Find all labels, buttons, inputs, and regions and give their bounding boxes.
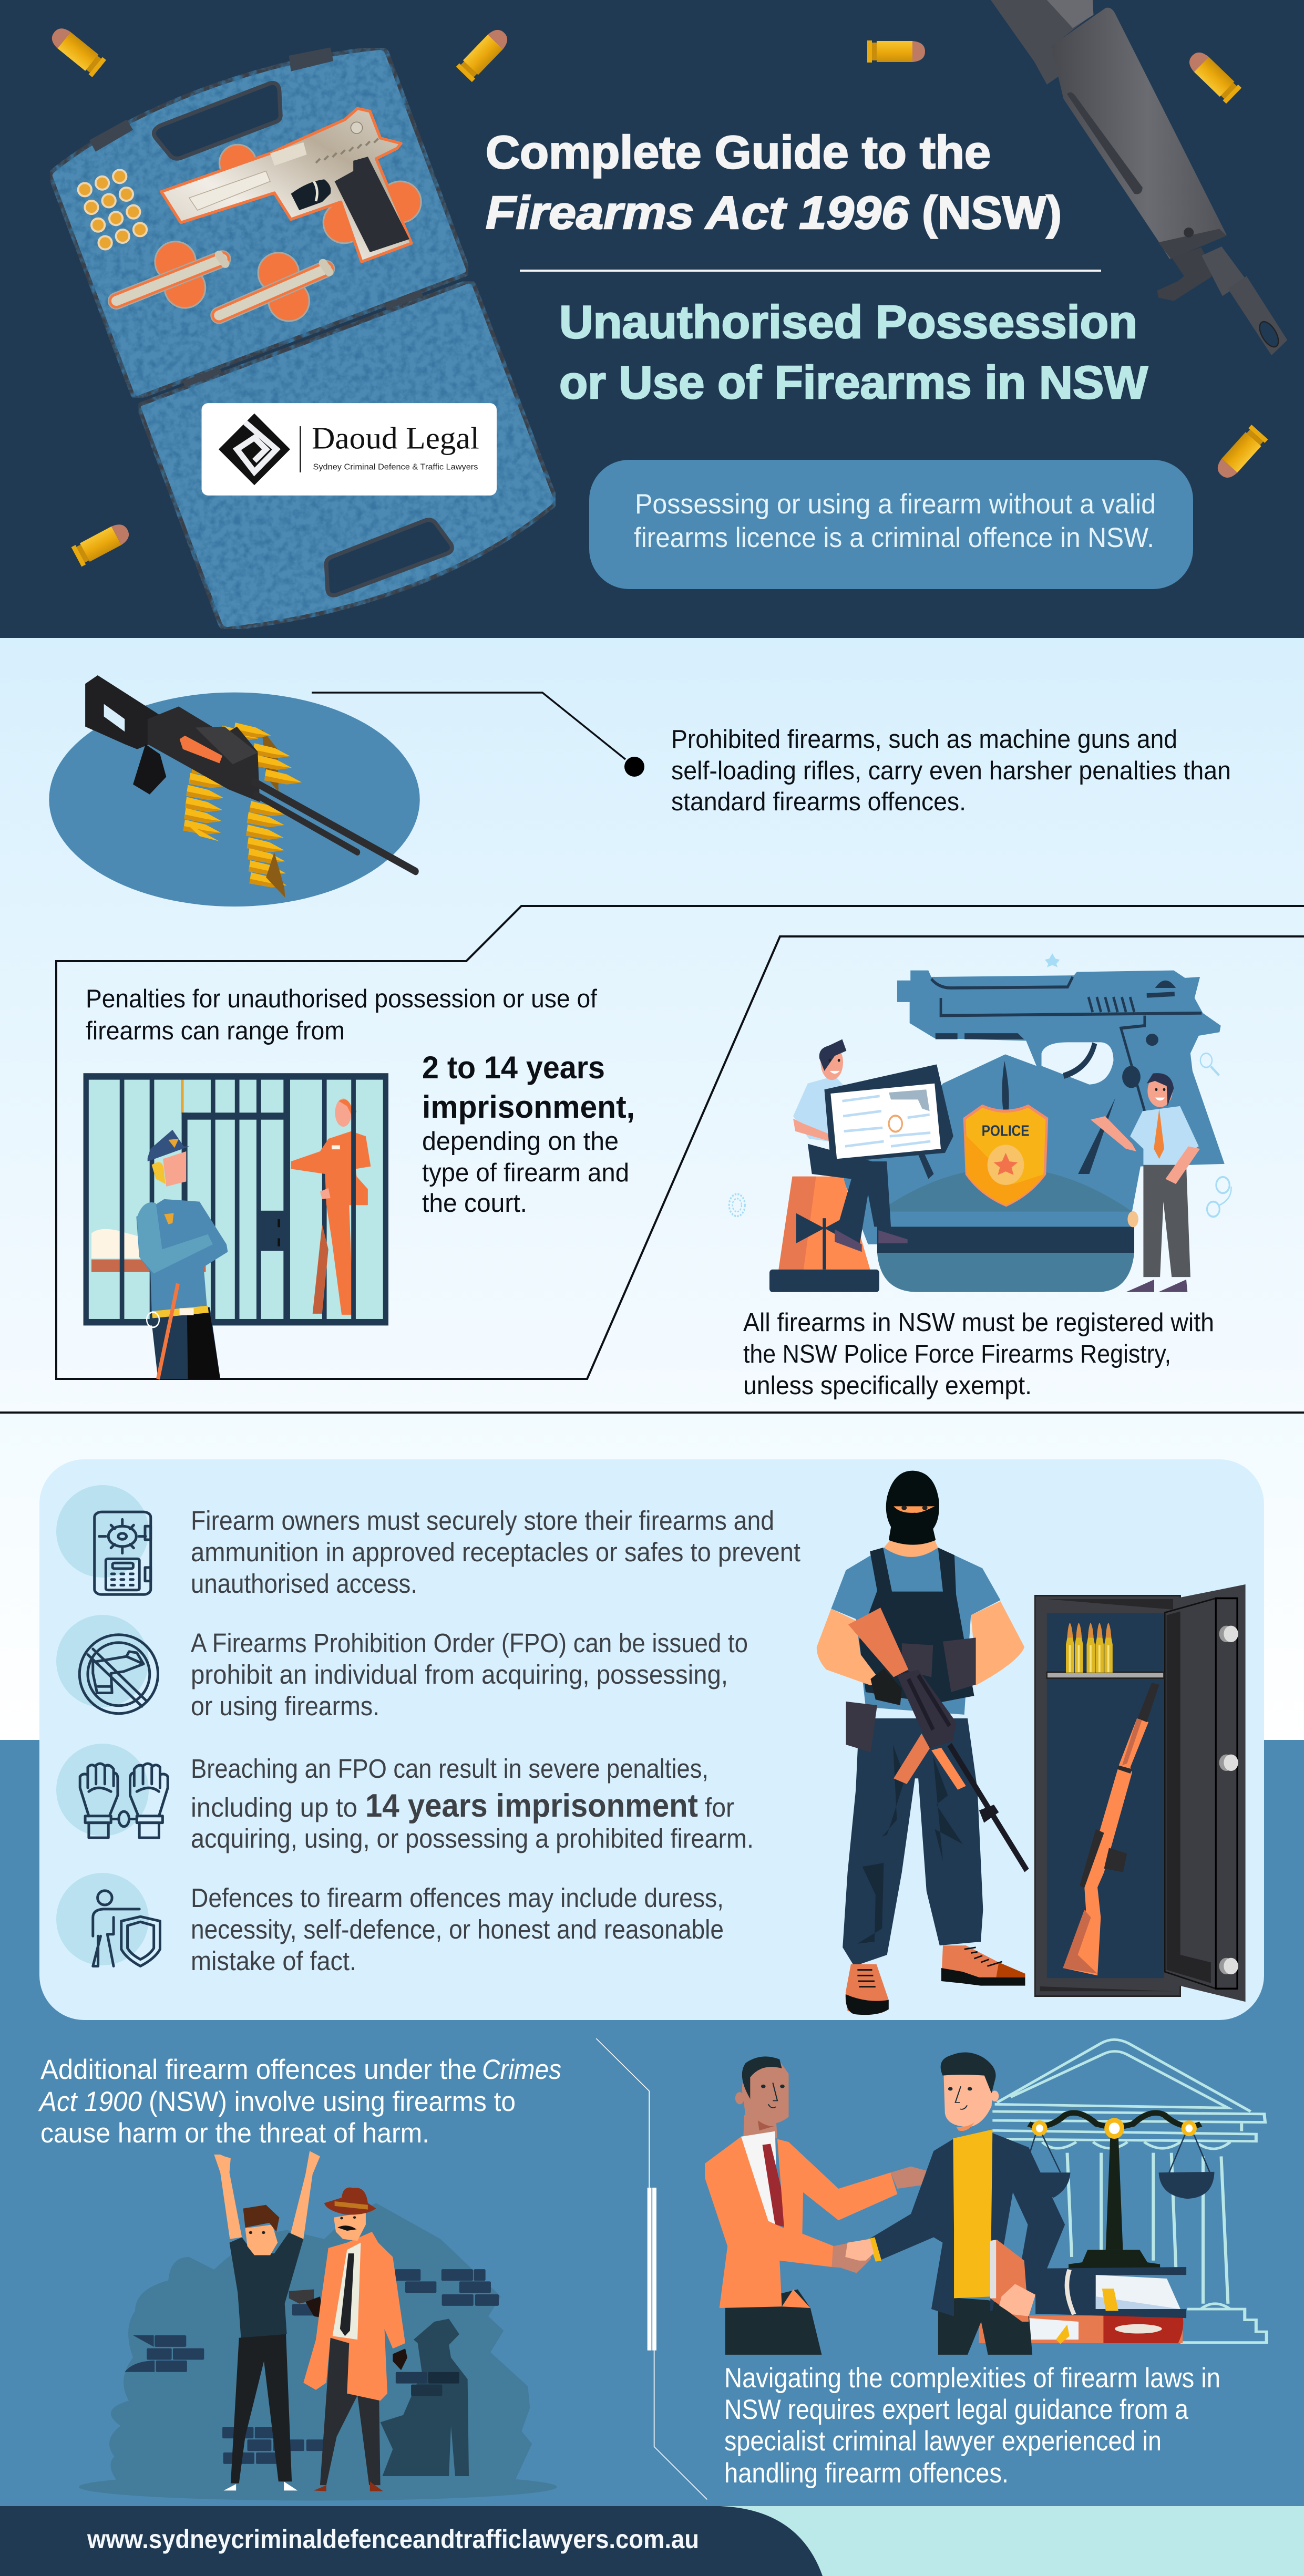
spare barrels xyxy=(116,255,329,315)
logo mark xyxy=(219,414,290,485)
orange receiver xyxy=(180,736,222,763)
callout: licence offence: firearms licence is a criminal offence in NSW. xyxy=(634,522,1154,553)
text: breaching an FPO: Breaching an FPO can result in severe penalties, xyxy=(191,1754,709,1784)
text: firearms prohibition order: A Firearms Prohibition Order (FPO) can be issued to xyxy=(191,1628,748,1658)
courthouse outline xyxy=(992,2039,1267,2343)
text: defences: Defences to firearm offences may include duress, xyxy=(191,1883,724,1913)
text: additional firearm offences: Crimes xyxy=(482,2054,561,2085)
subtitle: or Use of Firearms in NSW xyxy=(559,356,1148,408)
seat and gavel xyxy=(769,1177,879,1292)
police badge xyxy=(964,1106,1047,1205)
ammunition pouches xyxy=(846,1637,976,1752)
ammunition belts xyxy=(183,723,302,898)
neck xyxy=(884,1540,938,1557)
ground shadow xyxy=(79,2474,557,2500)
shelf xyxy=(1047,1672,1164,1678)
lock keyholes xyxy=(278,1219,280,1246)
safe door xyxy=(1165,1598,1216,1988)
pistol detail lines xyxy=(931,977,1202,1111)
latches and hinges xyxy=(89,47,423,387)
arms xyxy=(817,1609,880,1685)
rifle xyxy=(848,1608,1027,1870)
text: 2 to 14 years imprisonment: type of firearm and xyxy=(422,1159,629,1187)
text: prohibited firearms: self-loading rifles, carry even harsher penalties than xyxy=(671,757,1231,785)
subtitle xyxy=(559,296,1148,408)
pistol xyxy=(161,108,412,262)
illustration: hold-up scene xyxy=(79,2151,557,2500)
illustration: masked gunman xyxy=(817,1471,1027,2015)
text: additional firearm offences xyxy=(38,2054,561,2149)
bullet 4 xyxy=(1185,48,1241,104)
revolver and gloved hand xyxy=(289,2289,324,2318)
illustration: lawyer handshake xyxy=(705,2039,1267,2355)
bricks xyxy=(125,2269,499,2464)
bottom handle xyxy=(326,520,452,595)
light section background xyxy=(0,638,1304,1413)
bullet 2 xyxy=(456,25,512,82)
text: secure storage xyxy=(191,1506,800,1599)
gun stock xyxy=(85,675,162,749)
connector line to prohibited firearms note xyxy=(312,693,644,777)
door bolts xyxy=(1219,1626,1238,1974)
illustration: rifle barrel xyxy=(991,0,1287,355)
barrels xyxy=(254,782,416,871)
icon: safe with keypad xyxy=(95,1512,151,1594)
divider bracket lines xyxy=(596,2038,707,2499)
text: defences xyxy=(191,1883,724,1976)
icon: cuffed hands xyxy=(80,1764,168,1838)
title: (NSW) xyxy=(922,187,1062,239)
scales of justice xyxy=(1029,2113,1215,2269)
text: breaching an FPO: 14 years imprisonment xyxy=(365,1788,698,1824)
text: defences: necessity, self-defence, or honest and reasonable xyxy=(191,1914,724,1944)
text: firearms prohibition order: prohibit an individual from acquiring, possessing, xyxy=(191,1660,728,1689)
bars in front of prisoner xyxy=(351,1077,356,1321)
text: penalties intro xyxy=(86,985,597,1045)
top handle xyxy=(154,83,281,159)
text: secure storage: unauthorised access. xyxy=(191,1569,417,1599)
orange foam cut-outs xyxy=(155,145,421,321)
bullet 3 xyxy=(867,40,925,63)
eye slot xyxy=(894,1506,935,1513)
logo wordmark: Daoud Legal xyxy=(312,421,479,455)
text: 2 to 14 years imprisonment: 2 to 14 years xyxy=(422,1050,605,1085)
police badge: POLICE xyxy=(982,1122,1030,1139)
standing officer xyxy=(1091,1073,1200,1292)
text: penalties intro: Penalties for unauthorised possession or use of xyxy=(86,985,597,1013)
balaclava xyxy=(886,1471,939,1545)
icon: person with shield xyxy=(93,1891,160,1966)
callout: licence offence: Possessing or using a firearm without a valid xyxy=(635,489,1156,520)
text: expert legal guidance: handling firearm offences. xyxy=(724,2458,1009,2489)
text: 2 to 14 years imprisonment: the court. xyxy=(422,1189,527,1218)
text: expert legal guidance xyxy=(724,2363,1220,2489)
text: firearms prohibition order xyxy=(191,1628,748,1721)
text: 2 to 14 years imprisonment: depending on the xyxy=(422,1127,619,1156)
text: additional firearm offences: Additional firearm offences under the xyxy=(40,2054,477,2085)
seated officer with registration card xyxy=(793,1039,953,1252)
footer website bar xyxy=(0,2506,823,2576)
police officer xyxy=(136,1130,228,1379)
text: expert legal guidance: NSW requires expert legal guidance from a xyxy=(724,2394,1188,2425)
bed xyxy=(91,1229,206,1272)
trousers xyxy=(843,1718,983,1966)
footer website bar: www.sydneycriminaldefenceandtrafficlawyers.com.au xyxy=(87,2525,699,2554)
icon background circles xyxy=(56,1485,149,1965)
text: registration requirement xyxy=(743,1308,1214,1400)
illustration: prison cell xyxy=(86,1076,386,1379)
safety section background xyxy=(0,1413,1304,1740)
blue section background xyxy=(0,1740,1304,2506)
text: additional firearm offences: (NSW) involve using firearms to xyxy=(149,2086,516,2117)
text: breaching an FPO: for xyxy=(705,1792,734,1822)
lawyer in navy jacket xyxy=(845,2053,1065,2355)
illustration: police registry scene xyxy=(729,954,1231,1292)
text: 2 to 14 years imprisonment xyxy=(422,1050,635,1218)
panel: safe storage and FPO xyxy=(0,1459,1304,2576)
gun body xyxy=(148,706,260,802)
text: breaching an FPO xyxy=(191,1754,754,1853)
detective in orange coat xyxy=(303,2188,407,2491)
header background xyxy=(0,0,1304,638)
icon: prohibited gun xyxy=(79,1635,158,1714)
text: registration requirement: All firearms in NSW must be registered with xyxy=(743,1308,1214,1337)
wall silhouette xyxy=(109,2203,532,2480)
bars xyxy=(120,1077,327,1321)
text: prohibited firearms: Prohibited firearms, such as machine guns and xyxy=(671,725,1177,754)
text: secure storage: ammunition in approved receptacles or safes to prevent xyxy=(191,1537,800,1567)
text: breaching an FPO: including up to xyxy=(191,1792,357,1822)
text: firearms prohibition order: or using firearms. xyxy=(191,1691,379,1721)
illustration: machine gun xyxy=(49,675,420,906)
bullet 6 xyxy=(71,520,132,566)
text: expert legal guidance: Navigating the complexities of firearm laws in xyxy=(724,2363,1220,2394)
illustration: open gun safe xyxy=(1035,1584,1246,2002)
text: penalties intro: firearms can range from xyxy=(86,1017,345,1045)
text: 2 to 14 years imprisonment: imprisonment, xyxy=(422,1089,635,1125)
title xyxy=(486,126,1062,239)
case bottom half xyxy=(139,282,556,629)
text: additional firearm offences: cause harm or the threat of harm. xyxy=(40,2118,429,2149)
title: Firearms Act 1996 xyxy=(486,187,909,239)
text: prohibited firearms xyxy=(671,725,1231,816)
text: breaching an FPO: acquiring, using, or possessing a prohibited firearm. xyxy=(191,1823,754,1853)
victim with raised hands xyxy=(214,2151,320,2490)
callout: licence offence xyxy=(589,460,1193,589)
footer teal band xyxy=(0,2506,1304,2576)
panel outline: penalties and registry xyxy=(56,906,1304,1379)
logo tagline: Sydney Criminal Defence & Traffic Lawyers xyxy=(313,462,478,471)
text: defences: mistake of fact. xyxy=(191,1946,356,1976)
prisoner xyxy=(291,1099,371,1315)
overalls bib xyxy=(859,1548,974,1703)
text: expert legal guidance: specialist criminal lawyer experienced in xyxy=(724,2426,1162,2457)
case top half xyxy=(50,48,468,398)
text: prohibited firearms: standard firearms offences. xyxy=(671,788,966,816)
title: Complete Guide to the xyxy=(486,126,991,178)
law books xyxy=(979,2267,1186,2344)
lawyer in orange jacket xyxy=(705,2056,927,2355)
shadow figure xyxy=(381,2319,469,2476)
cartridge shells xyxy=(78,170,147,250)
decorative police icons xyxy=(729,954,1231,1217)
subtitle: Unauthorised Possession xyxy=(559,296,1137,348)
text: additional firearm offences: Act 1900 xyxy=(38,2086,142,2117)
text: secure storage: Firearm owners must securely store their firearms and xyxy=(191,1506,774,1536)
bullet 5 xyxy=(1213,425,1268,482)
t-shirt xyxy=(831,1548,1001,1715)
text: registration requirement: unless specifically exempt. xyxy=(743,1372,1032,1400)
large pistol silhouette xyxy=(843,971,1225,1244)
ammunition rounds xyxy=(1066,1623,1113,1673)
police cap xyxy=(877,1168,1138,1292)
bullet 1 xyxy=(47,24,106,77)
gun grip xyxy=(133,744,166,795)
illustration: open gun case xyxy=(50,47,556,629)
glove xyxy=(870,1668,902,1705)
rifle in safe xyxy=(1063,1683,1159,1975)
logo card xyxy=(202,403,497,496)
boots xyxy=(846,1964,889,2013)
text: registration requirement: the NSW Police Force Firearms Registry, xyxy=(743,1340,1171,1368)
